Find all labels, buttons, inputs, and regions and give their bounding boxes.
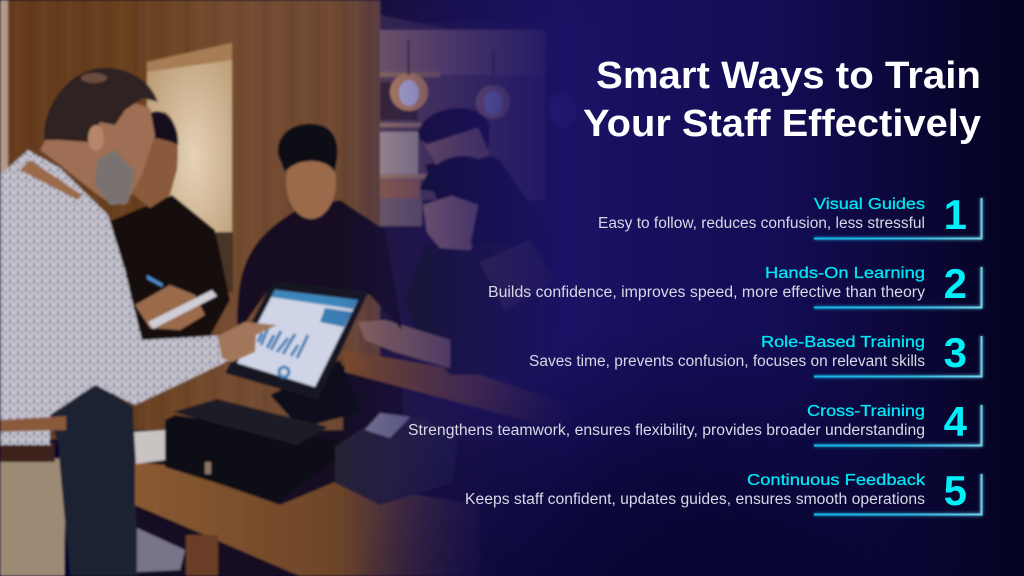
screen (237, 290, 358, 387)
item 2: Hands-On Learning: Hands-On Learning (765, 265, 925, 282)
item 2: Hands-On Learning: 2 (944, 260, 967, 307)
item 1: Visual Guides: Easy to follow, reduces confusion, less stressful (598, 215, 925, 232)
chart bars on screen (258, 328, 308, 358)
item 5: Continuous Feedback (465, 467, 982, 514)
receipt printer (335, 413, 458, 505)
cash drawer (165, 415, 340, 502)
drawer key (205, 462, 211, 474)
shirt (0, 150, 230, 445)
item 3: Role-Based Training: Role-Based Training (761, 334, 925, 351)
item 5: Continuous Feedback: Keeps staff confident, updates guides, ensures smooth operations (465, 491, 925, 508)
back bar shelves and lamps (380, 0, 640, 440)
item 4: Cross-Training: 4 (944, 398, 968, 445)
counter top right (343, 350, 570, 432)
staff member centre (237, 124, 402, 330)
keyboard (173, 399, 328, 445)
item 1: Visual Guides: 1 (944, 191, 967, 238)
bezel (225, 281, 369, 400)
background photo: restaurant staff training at a POS terminal (0, 0, 650, 576)
apron (50, 382, 138, 576)
man with apron (0, 68, 230, 576)
pants and belt (0, 458, 65, 576)
title: Smart Ways to Train (596, 55, 981, 97)
POS terminal (225, 281, 369, 428)
staff member with notepad (108, 111, 230, 345)
item 5: Continuous Feedback: 5 (944, 467, 967, 514)
woman staff (358, 156, 560, 375)
item 4: Cross-Training: Cross-Training (807, 403, 925, 420)
title: Your Staff Effectively (583, 103, 981, 145)
stand (270, 360, 362, 428)
dark lower area (130, 430, 650, 576)
dark base under rear counter (343, 365, 403, 445)
counter (135, 462, 480, 576)
staff member behind (418, 108, 562, 330)
item 3: Role-Based Training (529, 329, 982, 376)
item 3: Role-Based Training: 3 (944, 329, 967, 376)
title (583, 55, 981, 145)
item 2: Hands-On Learning (488, 260, 982, 308)
item 1: Visual Guides: Visual Guides (814, 196, 925, 213)
item 5: Continuous Feedback: Continuous Feedback (747, 472, 926, 489)
doorway (147, 43, 233, 292)
head (40, 90, 155, 205)
man's hand pointing at screen (218, 322, 277, 362)
item 2: Hands-On Learning: Builds confidence, improves speed, more effective than theory (488, 284, 925, 301)
item 4: Cross-Training (408, 398, 982, 446)
item 1: Visual Guides (598, 191, 982, 238)
item 4: Cross-Training: Strengthens teamwork, ensures flexibility, provides broader understanding (408, 422, 925, 439)
item 3: Role-Based Training: Saves time, prevents confusion, focuses on relevant skills (529, 353, 925, 370)
wood wall (0, 0, 380, 440)
